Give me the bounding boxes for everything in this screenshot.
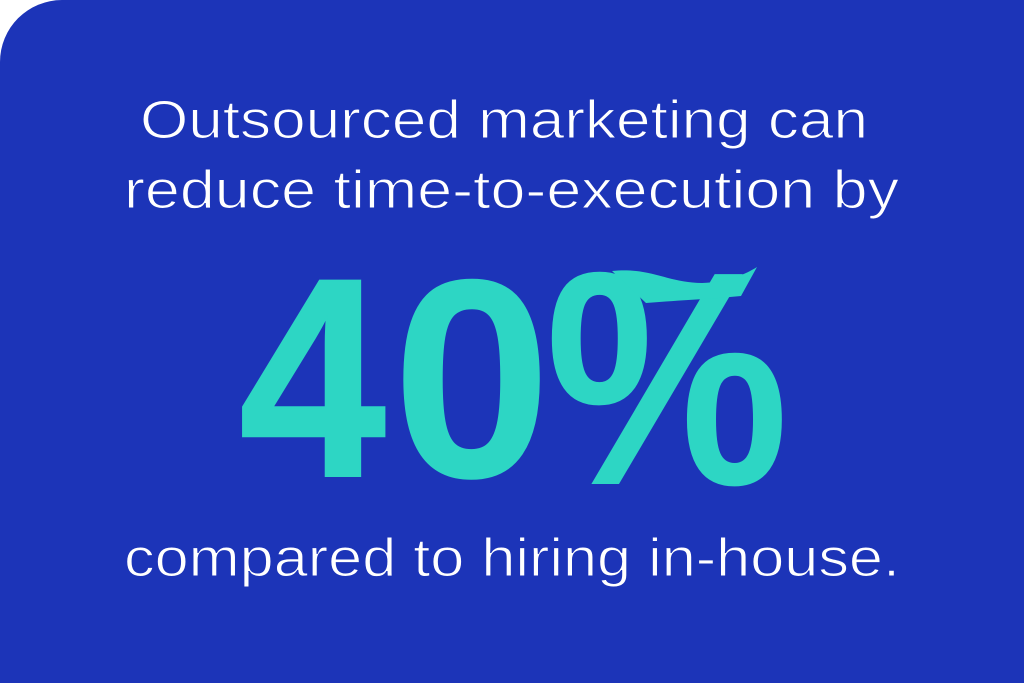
statistic digit 0: 0 [392,221,552,538]
closing text: compared to hiring in-house. [124,528,900,588]
statistic percent sign: % [545,209,789,549]
statistic digit 4: 4 [239,220,388,537]
heading line 2: reduce time-to-execution by [124,160,899,220]
percent swash [612,267,757,303]
heading line 1: Outsourced marketing can [140,90,868,150]
big statistic: 40% [239,209,789,549]
heading: intro text [124,90,899,220]
